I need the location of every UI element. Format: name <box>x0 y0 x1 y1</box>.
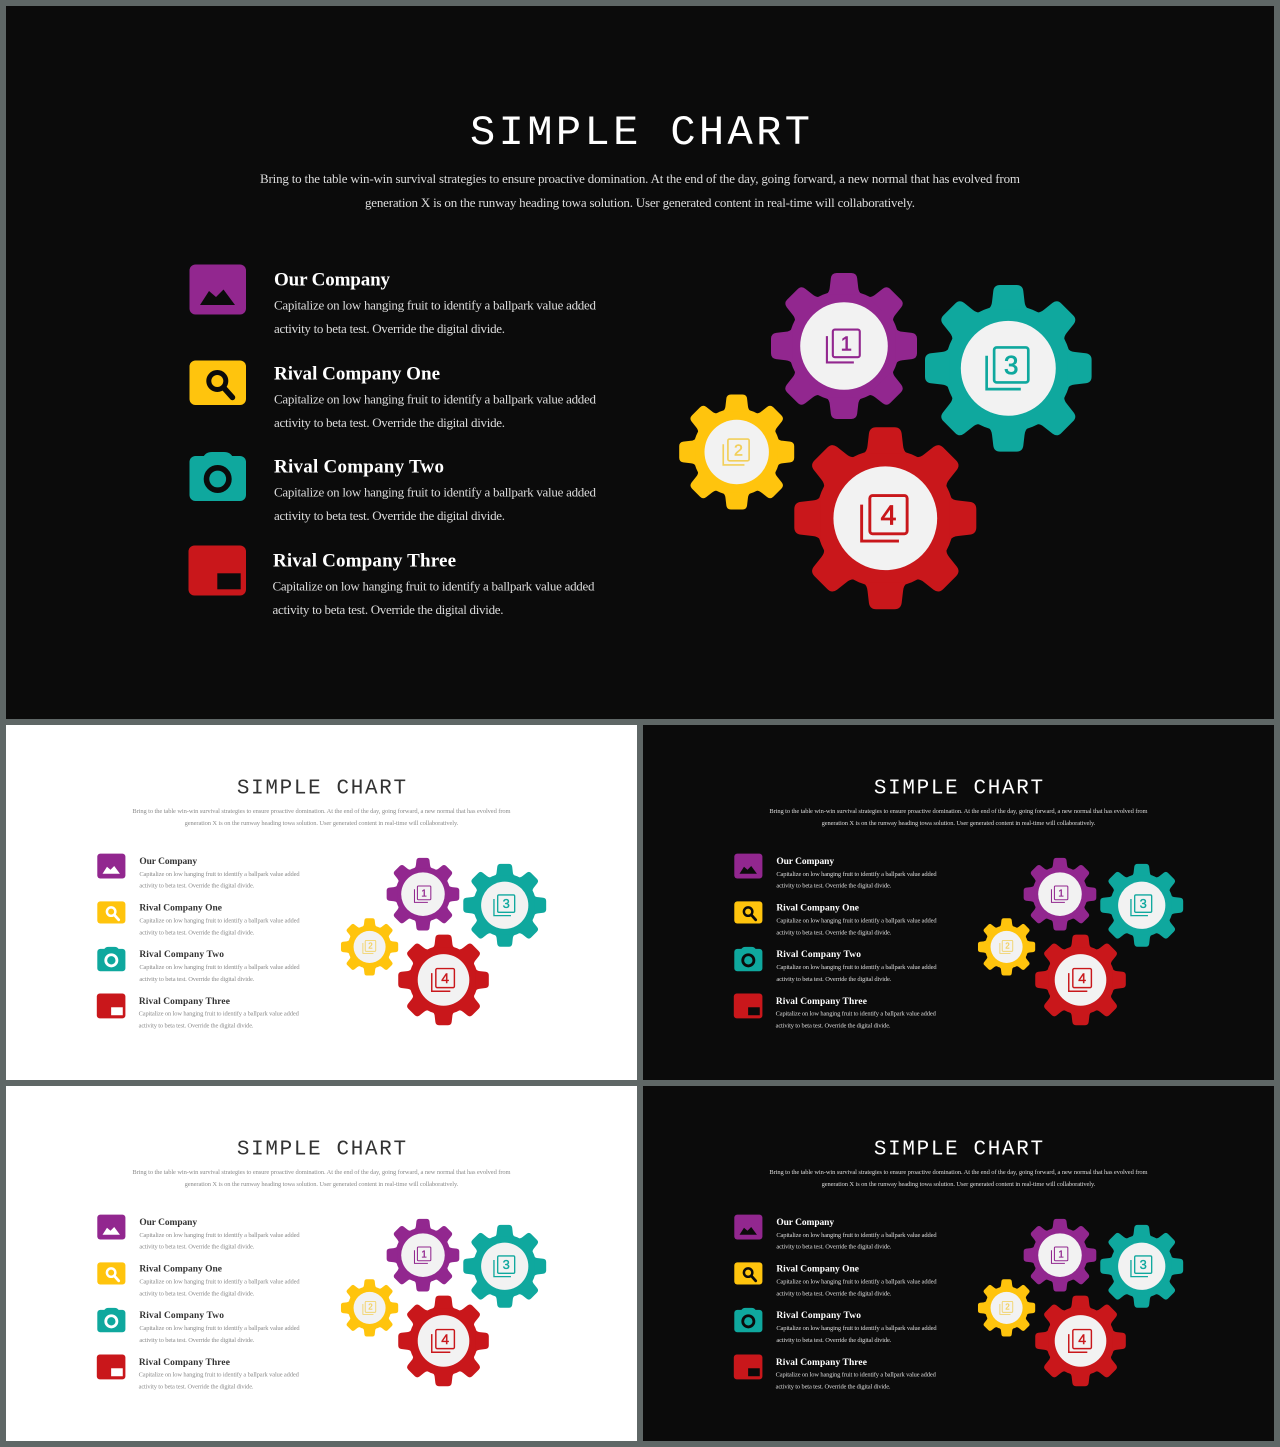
intro paragraph: generation X is on the runway heading towa solution. User generated content in real-time will collaboratively. <box>822 1181 1096 1188</box>
intro paragraph: Bring to the table win-win survival strategies to ensure proactive domination. At the end of the day, going forward, a new normal that has evolved from <box>132 1169 511 1176</box>
text: Rival Company Three: Capitalize on low hanging fruit to identify a ballpark value added <box>272 578 595 593</box>
text: Rival Company Two: activity to beta test. Override the digital divide. <box>776 1337 892 1344</box>
gear 3: teal <box>463 864 546 947</box>
gear 3: teal: 3 <box>1004 352 1018 380</box>
icon: yellow magnifier <box>734 1262 762 1285</box>
intro paragraph <box>132 1169 511 1188</box>
text: Rival Company Three: Capitalize on low hanging fruit to identify a ballpark value added <box>776 1011 937 1018</box>
text: Our Company: Our Company <box>776 857 834 867</box>
text: Rival Company Three <box>272 551 595 617</box>
text: Our Company <box>776 1218 937 1251</box>
text: Our Company: activity to beta test. Override the digital divide. <box>776 883 892 890</box>
gear 1: purple: 1 <box>421 1249 427 1260</box>
intro paragraph <box>769 1169 1148 1188</box>
text: Our Company <box>274 270 596 336</box>
text: Rival Company Three: activity to beta test. Override the digital divide. <box>776 1384 891 1391</box>
gear 1: purple: 1 <box>841 334 852 356</box>
icon: teal camera <box>734 947 762 971</box>
text: Rival Company Two: Rival Company Two <box>776 950 861 960</box>
text: Rival Company Three: activity to beta test. Override the digital divide. <box>139 1384 254 1391</box>
gear 4: red <box>1035 1296 1126 1386</box>
text: Rival Company One: activity to beta test. Override the digital divide. <box>776 1290 892 1297</box>
icon: teal camera <box>190 452 246 501</box>
panel: small white slide bottom left <box>6 1086 637 1441</box>
text: Our Company: Capitalize on low hanging fruit to identify a ballpark value added <box>776 871 937 878</box>
text: Our Company: Our Company <box>776 1218 834 1228</box>
gear 3: teal <box>925 285 1092 452</box>
text: Our Company: Capitalize on low hanging fruit to identify a ballpark value added <box>139 871 300 878</box>
gear 1: purple <box>387 1219 459 1291</box>
text: Rival Company Two <box>274 456 596 523</box>
text: Rival Company Three: activity to beta test. Override the digital divide. <box>776 1023 891 1030</box>
text: Rival Company Two: Capitalize on low hanging fruit to identify a ballpark value added <box>139 1325 300 1332</box>
text: Rival Company One: Rival Company One <box>776 1265 859 1275</box>
text: Rival Company One: Rival Company One <box>139 1265 222 1275</box>
gear 2: yellow <box>341 1279 398 1337</box>
text: Rival Company One <box>776 904 937 936</box>
intro paragraph: generation X is on the runway heading towa solution. User generated content in real-time will collaboratively. <box>185 820 459 827</box>
icon: purple image <box>97 854 125 878</box>
gear 3: teal <box>463 1225 546 1308</box>
text: Our Company: activity to beta test. Override the digital divide. <box>139 883 255 890</box>
text: Rival Company Two: Capitalize on low hanging fruit to identify a ballpark value added <box>139 964 300 971</box>
text: Our Company: activity to beta test. Override the digital divide. <box>274 321 505 336</box>
gear 4: red: 4 <box>1078 970 1086 986</box>
text: Our Company <box>139 1218 300 1251</box>
icon: yellow magnifier <box>97 901 125 924</box>
text: Rival Company Three: Capitalize on low hanging fruit to identify a ballpark value added <box>776 1372 937 1379</box>
text: Rival Company Two: Capitalize on low hanging fruit to identify a ballpark value added <box>274 485 596 500</box>
text: Rival Company Two <box>776 950 937 983</box>
gear 4: red: 4 <box>441 970 449 986</box>
gear 1: purple <box>1024 1219 1096 1291</box>
gear 4: red <box>398 1296 489 1386</box>
intro paragraph: Bring to the table win-win survival strategies to ensure proactive domination. At the end of the day, going forward, a new normal that has evolved from <box>132 808 511 815</box>
gear 2: yellow: 2 <box>368 1303 373 1312</box>
text: Rival Company Two: Rival Company Two <box>776 1311 861 1321</box>
text: Rival Company Three: Capitalize on low hanging fruit to identify a ballpark value added <box>139 1011 300 1018</box>
gear 4: red <box>398 935 489 1025</box>
gear 4: red: 4 <box>1078 1331 1086 1347</box>
text: Rival Company One: Rival Company One <box>776 904 859 914</box>
text: Rival Company One: Capitalize on low hanging fruit to identify a ballpark value added <box>274 391 596 406</box>
icon: teal camera <box>97 1308 125 1332</box>
gear 2: yellow: 2 <box>1005 1303 1010 1312</box>
gear 4: red: 4 <box>881 499 896 531</box>
text: Rival Company One: activity to beta test. Override the digital divide. <box>274 415 505 430</box>
text: Rival Company Three <box>776 997 937 1030</box>
icon: purple image <box>190 264 246 314</box>
gear 4: red: 4 <box>441 1331 449 1347</box>
text: Rival Company Two: Capitalize on low hanging fruit to identify a ballpark value added <box>776 1325 937 1332</box>
text: Rival Company One: Rival Company One <box>274 363 440 384</box>
icon: yellow magnifier <box>190 360 246 405</box>
text: Rival Company One: Capitalize on low hanging fruit to identify a ballpark value added <box>776 1279 937 1286</box>
gear 4: red <box>1035 935 1126 1025</box>
intro paragraph: generation X is on the runway heading towa solution. User generated content in real-time will collaboratively. <box>822 820 1096 827</box>
intro paragraph <box>132 808 511 827</box>
text: Rival Company One <box>776 1265 937 1297</box>
icon: red picture in picture <box>97 993 125 1018</box>
text: Rival Company Three: Rival Company Three <box>139 1358 230 1368</box>
text: Our Company: activity to beta test. Override the digital divide. <box>139 1244 255 1251</box>
text: Rival Company One: activity to beta test. Override the digital divide. <box>776 929 892 936</box>
gear 2: yellow <box>679 394 794 510</box>
gear 2: yellow: 2 <box>368 942 373 951</box>
text: Rival Company Three <box>139 997 300 1030</box>
text: Rival Company Three: Rival Company Three <box>273 551 456 572</box>
gear 3: teal <box>1100 1225 1183 1308</box>
text: Rival Company One <box>274 363 596 430</box>
icon: yellow magnifier <box>734 901 762 924</box>
text: Our Company: Capitalize on low hanging fruit to identify a ballpark value added <box>274 298 596 312</box>
panel: small dark slide top right <box>643 725 1274 1080</box>
gear 3: teal: 3 <box>503 896 510 911</box>
text: Rival Company Three: Rival Company Three <box>139 997 230 1007</box>
text: Rival Company Three: Rival Company Three <box>776 1358 867 1368</box>
gear 3: teal <box>1100 864 1183 947</box>
panel: small white slide top left <box>6 725 637 1080</box>
text: Rival Company One: Rival Company One <box>139 904 222 914</box>
text: Our Company: activity to beta test. Override the digital divide. <box>776 1244 892 1251</box>
icon: red picture in picture <box>97 1354 125 1379</box>
text: Our Company <box>776 857 937 890</box>
panel: main dark slide <box>6 6 1274 719</box>
gear 4: red <box>794 427 976 609</box>
text: Rival Company Three: Capitalize on low hanging fruit to identify a ballpark value added <box>139 1372 300 1379</box>
text: Our Company <box>139 857 300 890</box>
gear 3: teal: 3 <box>1140 896 1147 911</box>
intro paragraph: Bring to the table win-win survival strategies to ensure proactive domination. At the end of the day, going forward, a new normal that has evolved from <box>769 808 1148 815</box>
text: Rival Company Two: activity to beta test. Override the digital divide. <box>139 976 255 983</box>
gear 1: purple: 1 <box>421 888 427 899</box>
gear 2: yellow <box>978 1279 1035 1337</box>
intro paragraph <box>260 171 1020 210</box>
text: Our Company: Capitalize on low hanging fruit to identify a ballpark value added <box>776 1232 937 1239</box>
title: SIMPLE CHART <box>237 1139 406 1162</box>
text: Rival Company One: activity to beta test. Override the digital divide. <box>139 929 255 936</box>
intro paragraph: generation X is on the runway heading towa solution. User generated content in real-time will collaboratively. <box>365 195 915 210</box>
text: Rival Company Two: Rival Company Two <box>274 456 444 477</box>
text: Rival Company Two: activity to beta test. Override the digital divide. <box>274 508 505 523</box>
text: Rival Company One <box>139 904 300 936</box>
gear 1: purple: 1 <box>1058 1249 1064 1260</box>
icon: purple image <box>734 1215 762 1239</box>
icon: teal camera <box>734 1308 762 1332</box>
panel: small dark slide bottom right <box>643 1086 1274 1441</box>
text: Our Company: Our Company <box>274 270 390 290</box>
text: Rival Company Three <box>139 1358 300 1391</box>
gear 2: yellow: 2 <box>734 442 743 460</box>
gear 2: yellow <box>978 918 1035 976</box>
text: Rival Company Two: Rival Company Two <box>139 1311 224 1321</box>
text: Rival Company Two <box>776 1311 937 1344</box>
gear 2: yellow: 2 <box>1005 942 1010 951</box>
gear 1: purple <box>1024 858 1096 930</box>
title: SIMPLE CHART <box>874 778 1043 801</box>
icon: purple image <box>734 854 762 878</box>
text: Rival Company Three: Rival Company Three <box>776 997 867 1007</box>
text: Our Company: Our Company <box>139 857 197 867</box>
text: Rival Company Two <box>139 1311 300 1344</box>
intro paragraph: generation X is on the runway heading towa solution. User generated content in real-time will collaboratively. <box>185 1181 459 1188</box>
text: Rival Company Two: activity to beta test. Override the digital divide. <box>139 1337 255 1344</box>
gear 3: teal: 3 <box>1140 1257 1147 1272</box>
text: Rival Company One: Capitalize on low hanging fruit to identify a ballpark value added <box>139 918 300 925</box>
text: Rival Company One: Capitalize on low hanging fruit to identify a ballpark value added <box>139 1279 300 1286</box>
title: SIMPLE CHART <box>470 109 810 157</box>
title: SIMPLE CHART <box>237 778 406 801</box>
text: Rival Company Two: activity to beta test. Override the digital divide. <box>776 976 892 983</box>
gear 1: purple <box>387 858 459 930</box>
text: Rival Company Two <box>139 950 300 983</box>
text: Rival Company One <box>139 1265 300 1297</box>
text: Rival Company Two: Capitalize on low hanging fruit to identify a ballpark value added <box>776 964 937 971</box>
text: Rival Company Three: activity to beta test. Override the digital divide. <box>139 1023 254 1030</box>
gear 1: purple: 1 <box>1058 888 1064 899</box>
gear 2: yellow <box>341 918 398 976</box>
gear 3: teal: 3 <box>503 1257 510 1272</box>
intro paragraph <box>769 808 1148 827</box>
text: Rival Company Three: activity to beta test. Override the digital divide. <box>272 602 504 617</box>
text: Our Company: Our Company <box>139 1218 197 1228</box>
title: SIMPLE CHART <box>874 1139 1043 1162</box>
text: Rival Company Three <box>776 1358 937 1391</box>
text: Rival Company Two: Rival Company Two <box>139 950 224 960</box>
text: Rival Company One: Capitalize on low hanging fruit to identify a ballpark value added <box>776 918 937 925</box>
icon: teal camera <box>97 947 125 971</box>
icon: purple image <box>97 1215 125 1239</box>
icon: red picture in picture <box>734 1354 762 1379</box>
text: Rival Company One: activity to beta test. Override the digital divide. <box>139 1290 255 1297</box>
intro paragraph: Bring to the table win-win survival strategies to ensure proactive domination. At the end of the day, going forward, a new normal that has evolved from <box>769 1169 1148 1176</box>
gear 1: purple <box>771 273 917 419</box>
icon: red picture in picture <box>734 993 762 1018</box>
icon: red picture in picture <box>188 546 246 596</box>
text: Our Company: Capitalize on low hanging fruit to identify a ballpark value added <box>139 1232 300 1239</box>
intro paragraph: Bring to the table win-win survival strategies to ensure proactive domination. At the end of the day, going forward, a new normal that has evolved from <box>260 171 1020 186</box>
icon: yellow magnifier <box>97 1262 125 1285</box>
